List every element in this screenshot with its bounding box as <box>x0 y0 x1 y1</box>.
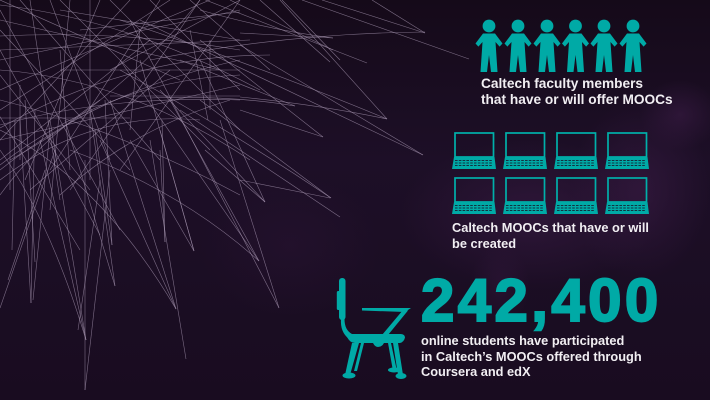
icon: student desk chair <box>337 278 411 379</box>
text: students caption: online students have participated <box>421 333 624 348</box>
text: faculty caption: Caltech faculty members <box>481 76 643 91</box>
icon: six faculty figures <box>476 20 646 72</box>
text: students caption: in Caltech’s MOOCs offered through <box>421 349 642 364</box>
text: MOOCs caption: be created <box>452 236 516 251</box>
text: MOOCs caption <box>452 220 649 251</box>
starburst of thin lines <box>0 0 469 390</box>
icon: eight laptops <box>452 133 649 214</box>
text: students caption <box>421 333 642 379</box>
text: MOOCs caption: Caltech MOOCs that have or will <box>452 220 649 235</box>
big number: online students: 242,400 <box>421 267 662 334</box>
text: students caption: Coursera and edX <box>421 364 531 379</box>
text: faculty caption <box>481 76 673 107</box>
text: faculty caption: that have or will offer MOOCs <box>481 92 673 107</box>
